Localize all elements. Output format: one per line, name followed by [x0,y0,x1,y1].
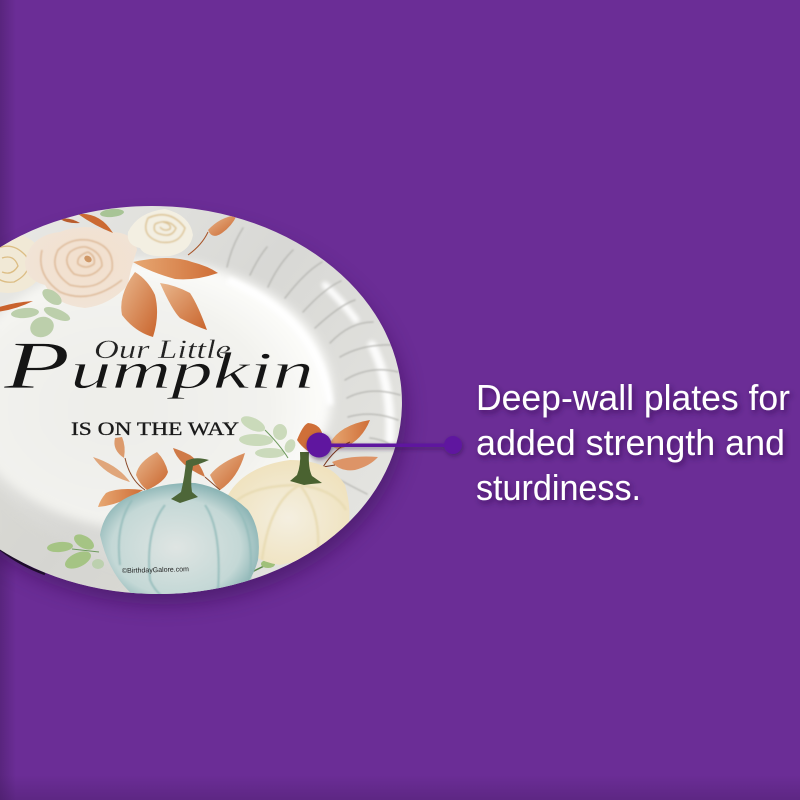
paper plate [0,206,402,594]
autumn leaves bottom [93,420,378,507]
script heading: Pumpkin: P umpkin [2,327,314,403]
connector line [319,444,453,447]
small cream rose [128,209,193,256]
plate lower left dark edge [0,549,45,574]
callout text: added strength and [476,422,785,463]
script heading: Our Little: Our Little [94,335,231,364]
copyright text: ©BirthdayGalore.com [122,565,189,575]
large peach rose [25,227,137,308]
green sprigs bottom [47,413,297,572]
cream pumpkin stem [290,452,322,485]
plate marker dot [306,432,332,458]
subheading: IS ON THE WAY [71,419,239,440]
autumn leaves top [0,214,237,337]
callout connector [306,432,462,458]
cream pumpkin [227,452,349,565]
floral top group [0,208,237,341]
callout text [476,377,790,508]
plate shadow [0,214,411,611]
lower rim shade [0,550,130,593]
callout text: Deep-wall plates for [476,377,790,418]
callout text: sturdiness. [476,467,641,508]
plate well [0,260,332,530]
green sprig top [11,208,124,341]
left rose [0,235,36,293]
plate rim [0,206,402,594]
end marker dot [444,436,462,454]
blue pumpkin [100,458,259,600]
rim ripples [227,228,400,528]
rim highlights [325,285,390,440]
well edge glow right [228,280,330,405]
blue pumpkin stem [171,458,209,503]
